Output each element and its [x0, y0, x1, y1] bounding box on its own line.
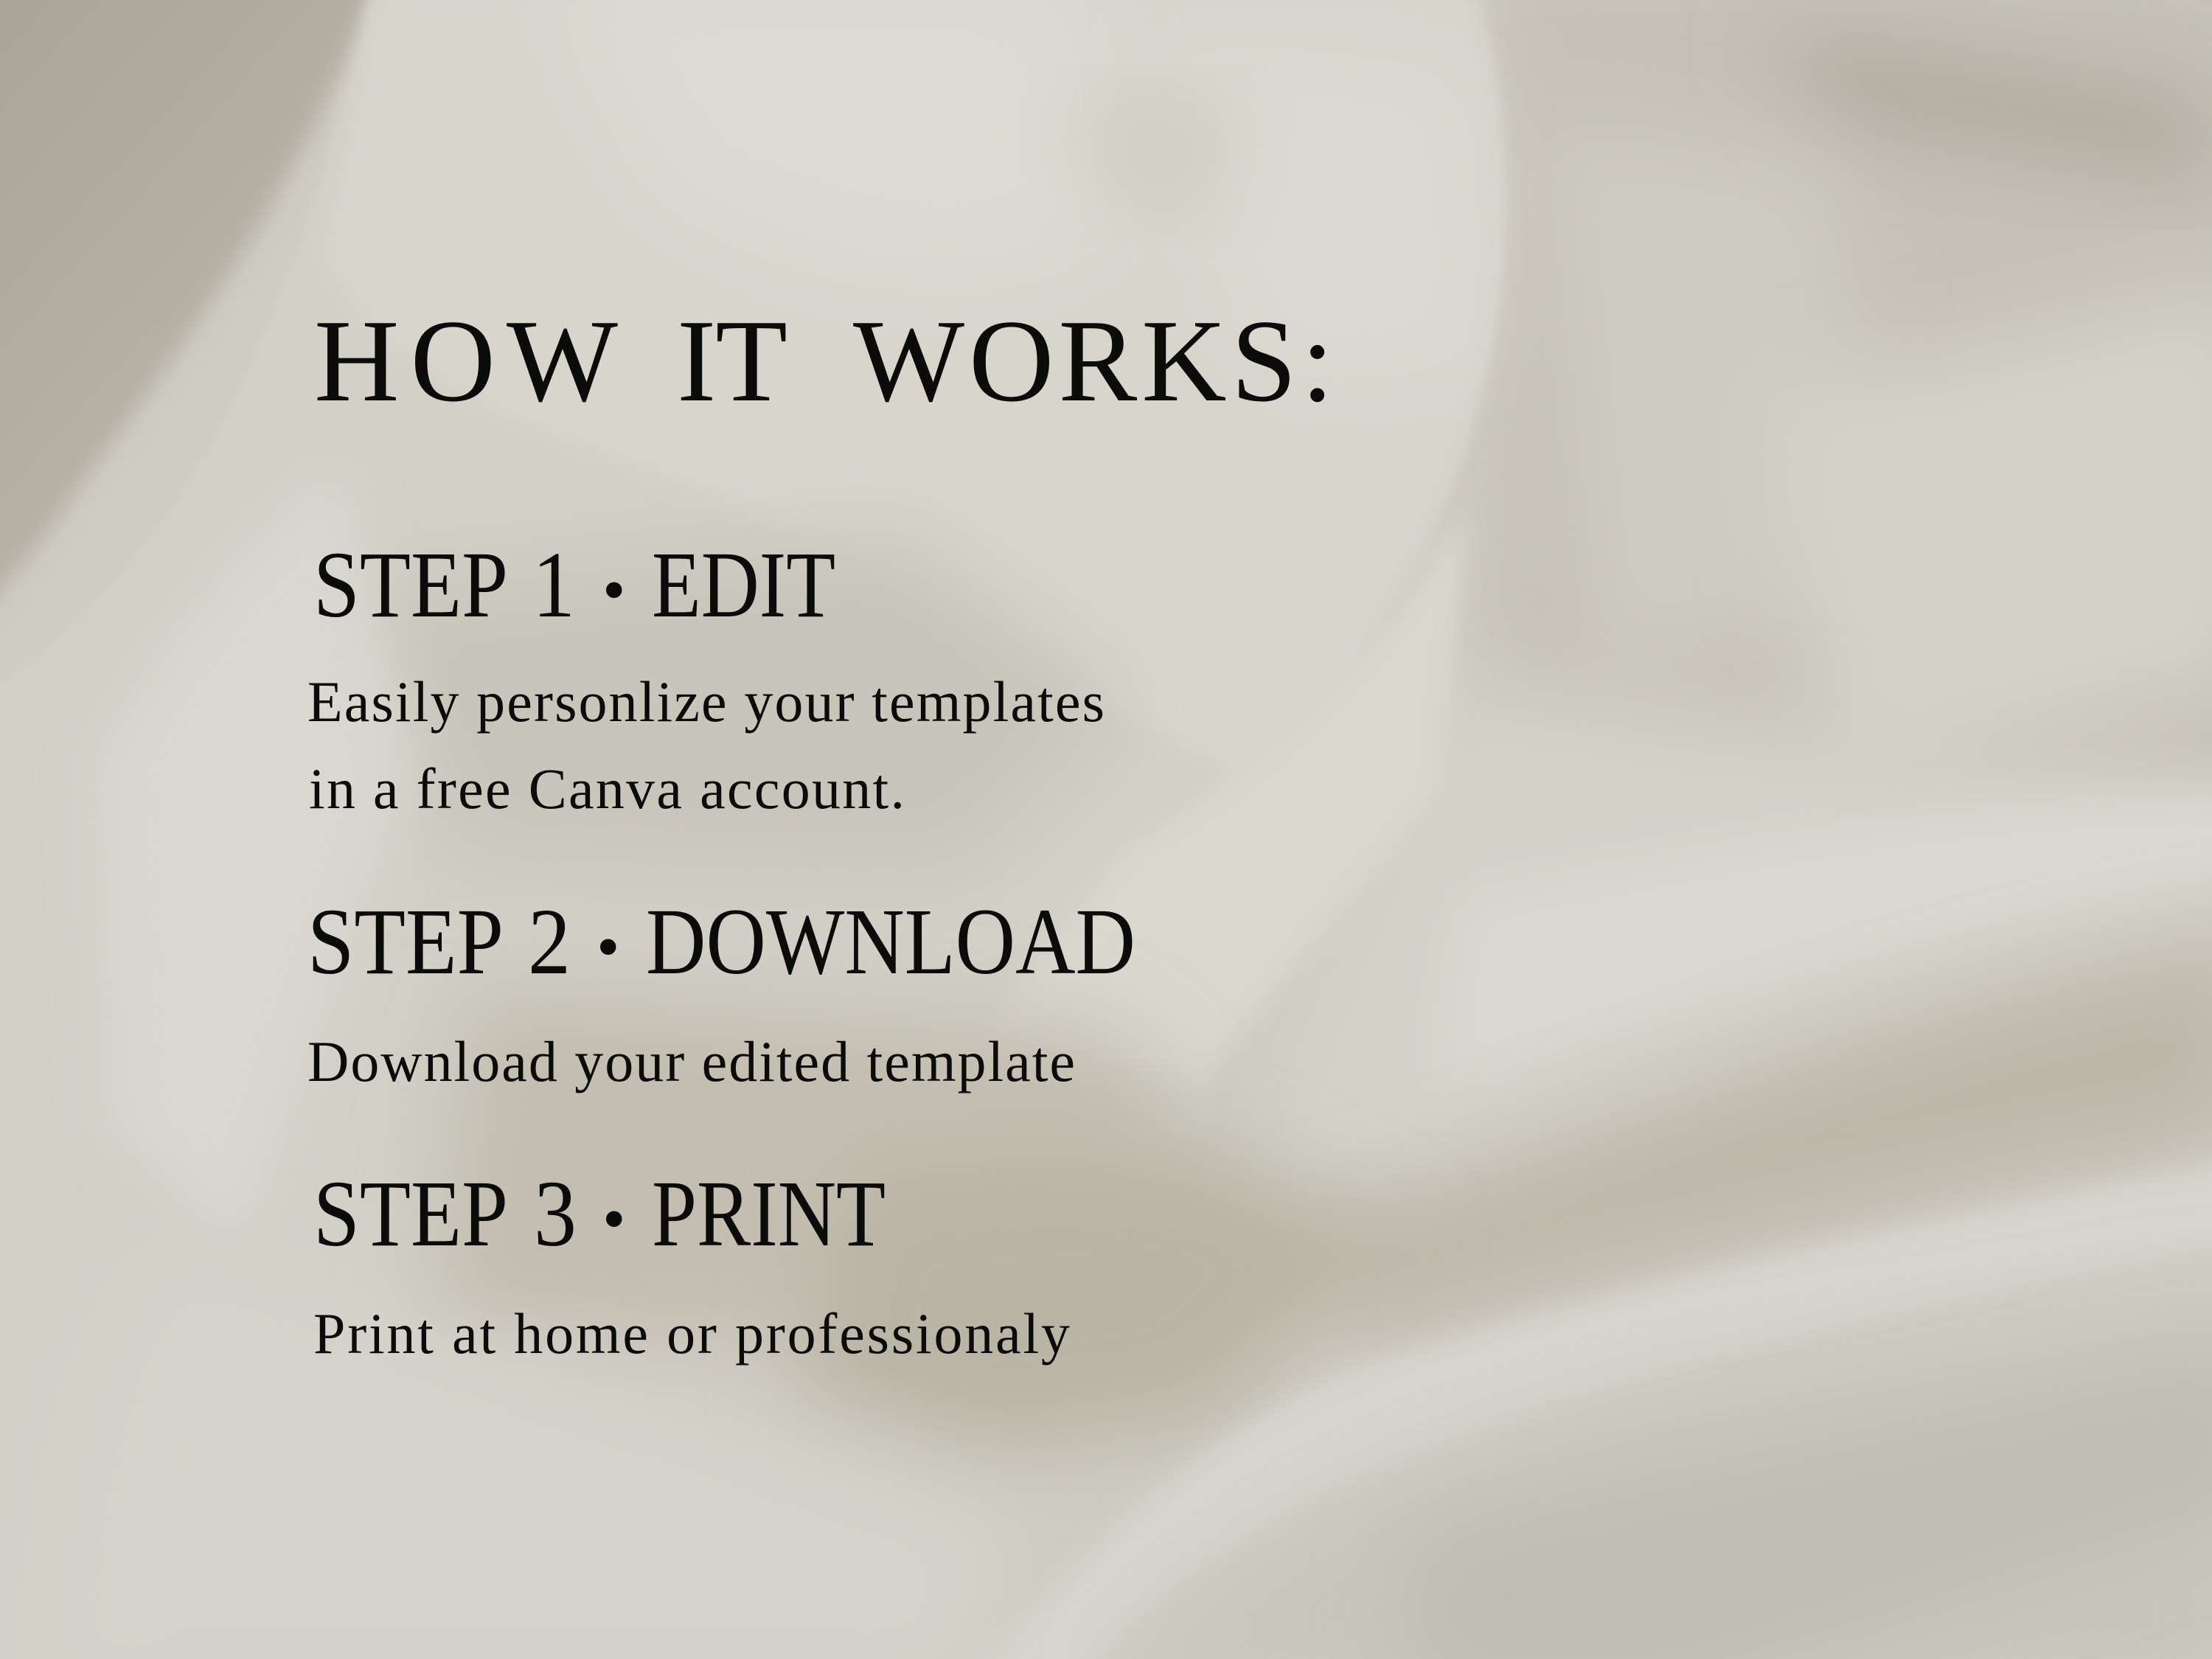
step 3 heading: PRINT — [652, 1161, 886, 1266]
step 1 heading: 1 — [532, 532, 575, 637]
step 1 heading: • — [602, 554, 626, 627]
step 1 description: Easily personlize your templates — [307, 669, 1105, 734]
step 1 heading — [313, 532, 835, 637]
step 2 heading: 2 — [528, 889, 571, 994]
step 1 heading: EDIT — [652, 532, 835, 637]
step 2 heading: STEP — [307, 889, 504, 994]
step 1 description: in a free Canva account. — [309, 757, 905, 821]
step 2 description: Download your edited template — [307, 1029, 1075, 1093]
title: WORKS: — [853, 295, 1334, 426]
step 2 — [307, 889, 1135, 1093]
step 2 heading: DOWNLOAD — [646, 889, 1135, 994]
step 3 — [313, 1161, 1070, 1366]
step 3 heading: • — [602, 1183, 626, 1256]
step 3 heading: 3 — [534, 1161, 577, 1266]
step 1 description — [307, 669, 1105, 821]
step 2 heading — [307, 889, 1135, 994]
step 3 heading — [313, 1161, 886, 1266]
step 2 heading: • — [597, 911, 620, 984]
step 3 description: Print at home or professionaly — [313, 1301, 1070, 1366]
step 3 heading: STEP — [313, 1161, 508, 1266]
step 1 heading: STEP — [313, 532, 508, 637]
step 1 — [307, 532, 1105, 821]
title — [314, 295, 1334, 426]
title: HOW — [314, 295, 618, 426]
title: IT — [677, 295, 787, 426]
